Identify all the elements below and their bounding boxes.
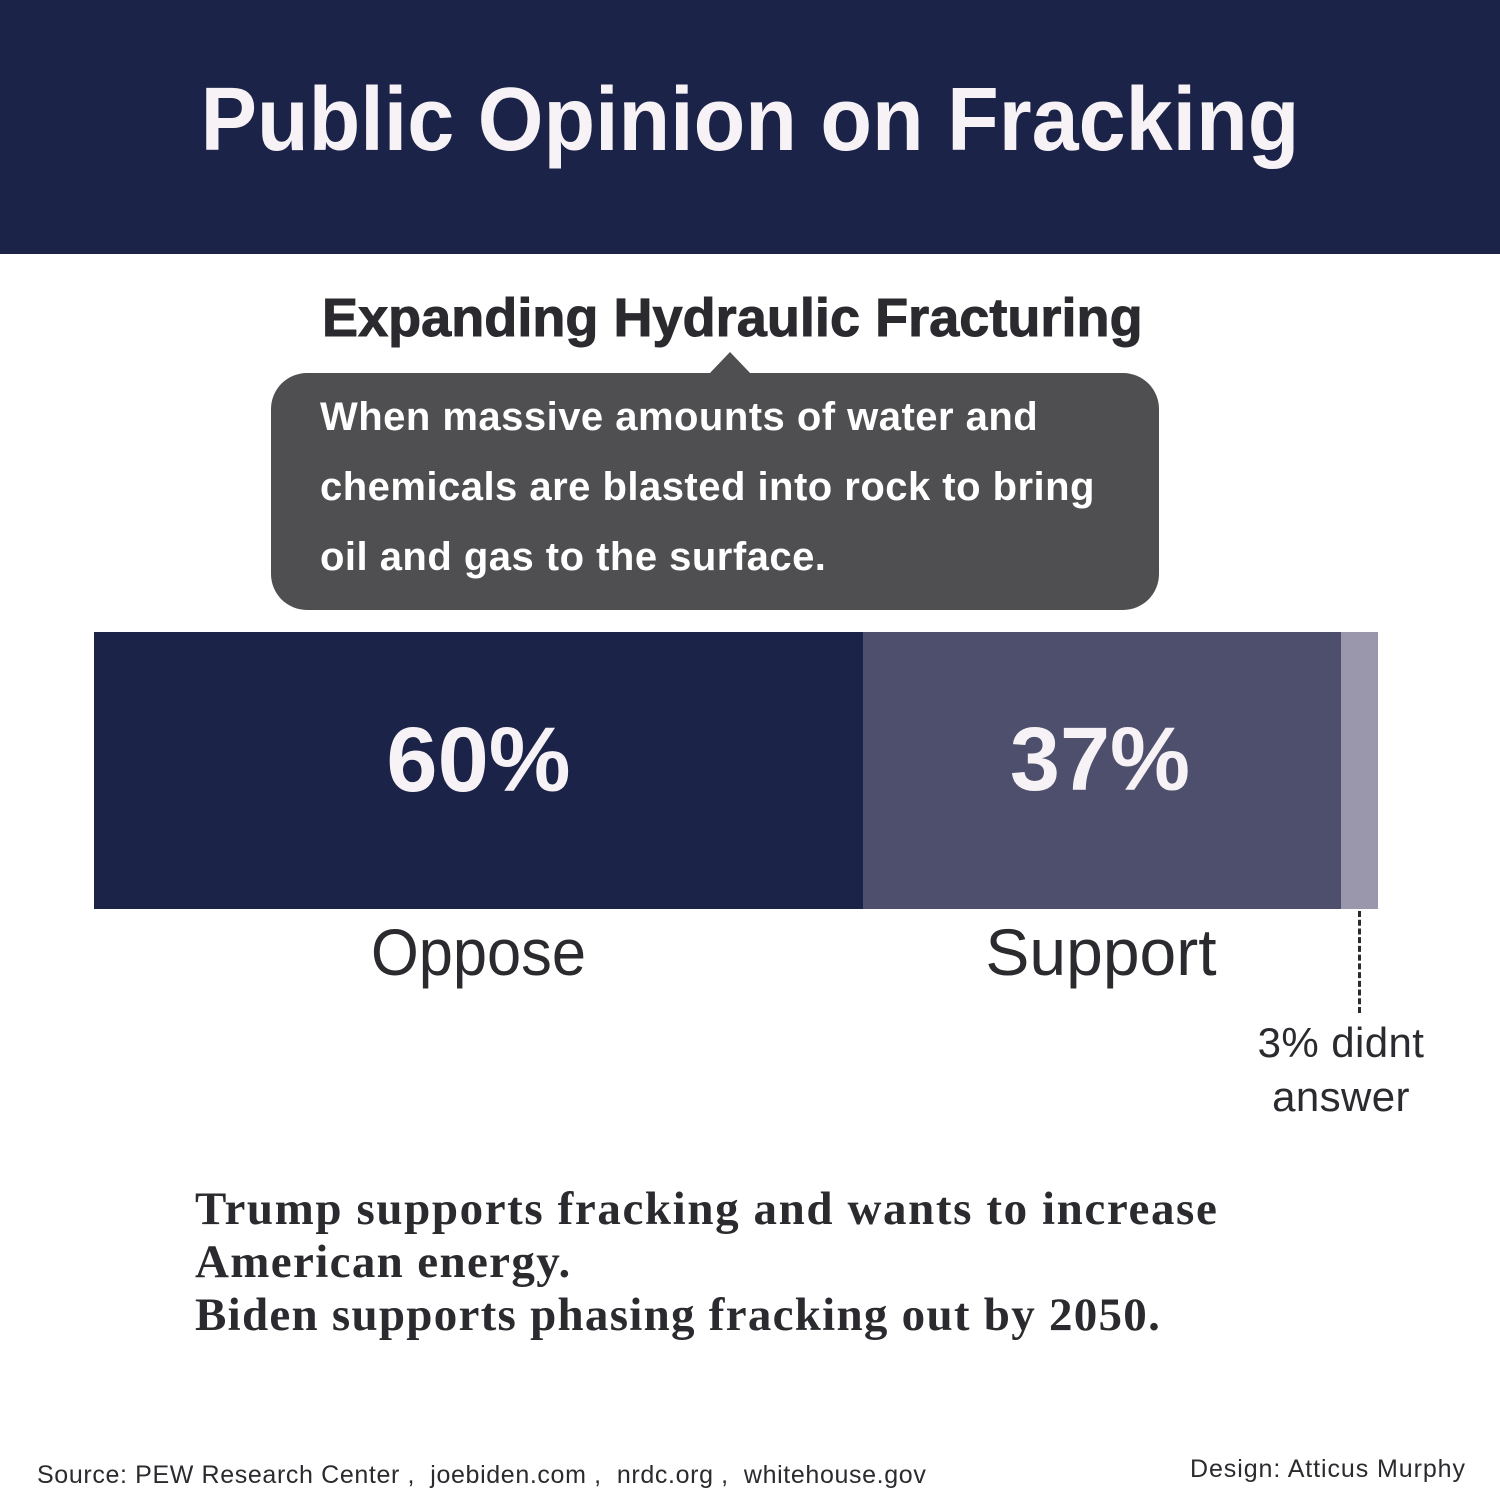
value: 37%: 37% bbox=[1010, 710, 1190, 810]
header banner bbox=[0, 0, 1500, 254]
design credit: Design: Atticus Murphy bbox=[1190, 1455, 1466, 1483]
stacked bar chart bbox=[94, 632, 1378, 909]
callout text: chemicals are blasted into rock to bring bbox=[320, 465, 1095, 509]
callout text: When massive amounts of water and bbox=[320, 395, 1038, 439]
callout text bbox=[320, 395, 1095, 579]
label: support: Support bbox=[985, 915, 1217, 989]
title: Public Opinion on Fracking bbox=[201, 70, 1299, 170]
callout box bbox=[271, 373, 1159, 610]
bar: support 37% bbox=[863, 632, 1341, 909]
subheading: Expanding Hydraulic Fracturing bbox=[322, 288, 1143, 348]
bar: oppose 60% bbox=[94, 632, 863, 909]
label: 3% didn't answer: 3% didnt bbox=[1258, 1019, 1424, 1066]
label: 3% didn't answer: answer bbox=[1272, 1073, 1410, 1120]
source: Source: PEW Research Center , joebiden.com , nrdc.org , whitehouse.gov bbox=[37, 1461, 926, 1489]
label: 3% didn't answer bbox=[1258, 1019, 1424, 1120]
value: 60%: 60% bbox=[386, 709, 571, 811]
candidate positions text: American energy. bbox=[195, 1236, 572, 1288]
label: oppose: Oppose bbox=[371, 915, 586, 989]
bar: no answer 3% bbox=[1341, 632, 1378, 909]
candidate positions text: Trump supports fracking and wants to increase bbox=[195, 1183, 1218, 1235]
dashed leader line bbox=[1358, 911, 1361, 1013]
candidate positions text bbox=[195, 1183, 1218, 1341]
callout text: oil and gas to the surface. bbox=[320, 535, 826, 579]
callout pointer bbox=[709, 352, 751, 374]
callout bbox=[271, 352, 1159, 610]
candidate positions text: Biden supports phasing fracking out by 2050. bbox=[195, 1289, 1161, 1341]
